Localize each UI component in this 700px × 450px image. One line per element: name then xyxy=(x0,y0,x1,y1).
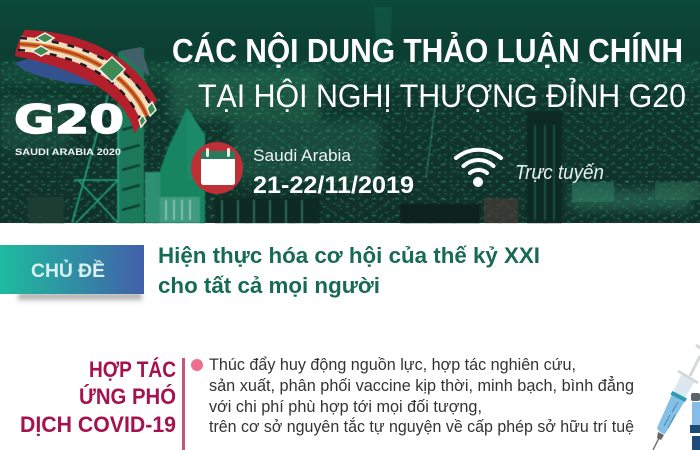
icon: wifi xyxy=(456,150,501,187)
theme text: cho tất cả mọi người xyxy=(158,273,380,298)
body text: sản xuất, phân phối vaccine kịp thời, minh bạch, bình đẳng xyxy=(209,376,634,395)
theme label: CHỦ ĐỀ xyxy=(31,260,105,282)
far tower on the skyline xyxy=(374,7,392,60)
G20 wordmark: G20 xyxy=(14,98,124,143)
dark tower xyxy=(527,112,562,223)
date and place: 21-22/11/2019 xyxy=(253,172,414,199)
pyramid tower xyxy=(160,108,205,223)
heading: covid-19 cooperation: ỨNG PHÓ xyxy=(79,384,176,409)
G20 logo xyxy=(14,30,157,158)
body text xyxy=(209,356,634,436)
body text: Thúc đẩy huy động nguồn lực, hợp tác nghiên cứu, xyxy=(209,356,576,374)
Saudi Arabia 2020 tagline: SAUDI ARABIA 2020 xyxy=(15,147,121,158)
heading: covid-19 cooperation xyxy=(20,357,176,437)
header banner: city at night xyxy=(0,0,700,223)
lower blocks xyxy=(484,198,518,223)
title xyxy=(172,31,686,114)
icon: syringe xyxy=(653,345,700,450)
slanted tower xyxy=(426,100,436,178)
body text: với chi phí phù hợp tới mọi đối tượng, xyxy=(209,398,482,416)
icon: vaccine vial xyxy=(690,393,700,450)
title: TẠI HỘI NGHỊ THƯỢNG ĐỈNH G20 xyxy=(198,78,686,114)
logo band xyxy=(15,30,157,134)
heading: covid-19 cooperation: HỢP TÁC xyxy=(89,357,176,382)
lattice tower xyxy=(118,48,144,223)
theme text: Hiện thực hóa cơ hội của thế kỷ XXI xyxy=(158,243,540,268)
heading: covid-19 cooperation: DỊCH COVID-19 xyxy=(20,412,176,437)
date and place xyxy=(253,146,414,199)
bottom blocks xyxy=(215,198,320,223)
logo band back xyxy=(15,58,102,86)
theme label xyxy=(0,245,144,303)
date and place: Saudi Arabia xyxy=(253,146,352,165)
theme text xyxy=(158,243,540,298)
icon: calendar xyxy=(191,142,243,194)
online label: Trực tuyến xyxy=(515,162,604,184)
bullet xyxy=(191,359,203,371)
body text: trên cơ sở nguyên tắc tự nguyện về cấp phép sở hữu trí tuệ xyxy=(209,417,634,436)
